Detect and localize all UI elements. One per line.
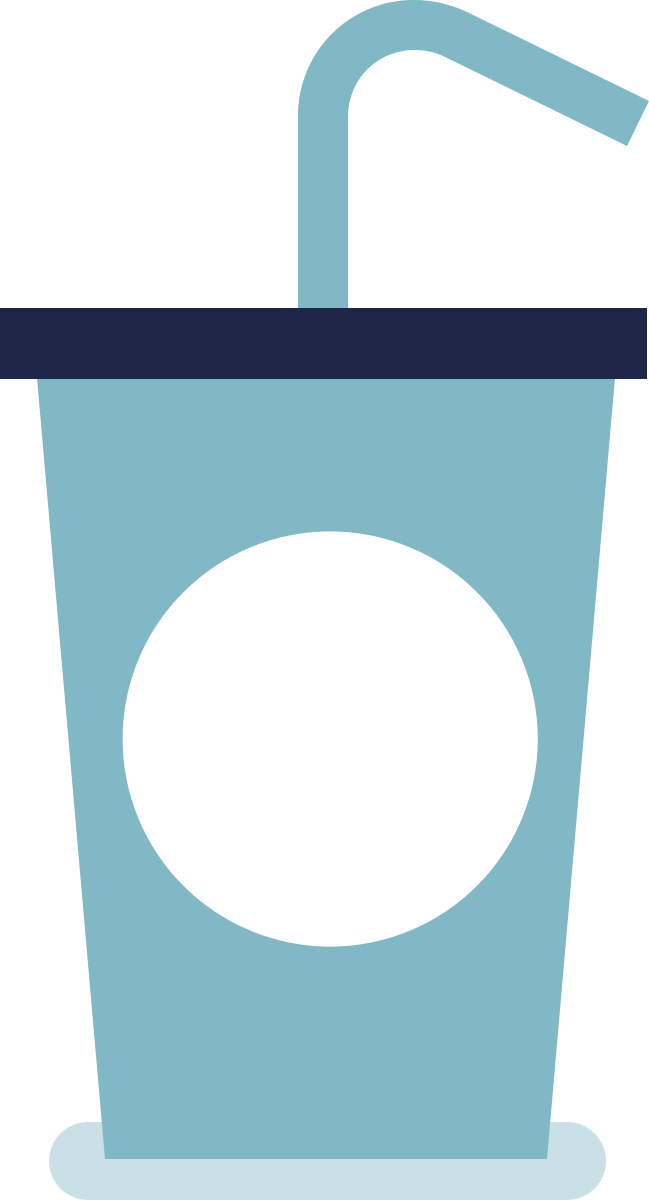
cup lid [0,308,647,379]
coaster base [49,1122,606,1200]
cup label circle [123,531,538,947]
cup body [37,378,615,1159]
straw [298,0,649,308]
